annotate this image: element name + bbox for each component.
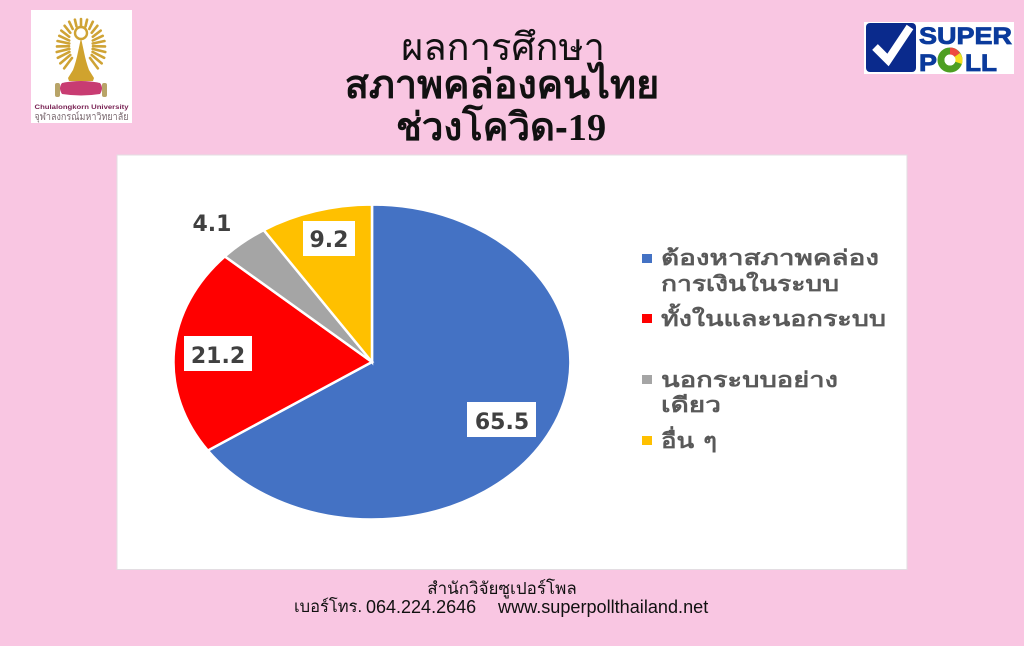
legend: gray: เดียว (661, 393, 721, 417)
legend: blue: การเงินในระบบ (661, 271, 839, 296)
slice: 9.2 yellow (264, 204, 372, 362)
label: 65.5 (467, 402, 536, 437)
legend (642, 246, 886, 453)
icon: pink cushion (60, 81, 102, 96)
footer line 2: www.superpollthailand.net (498, 597, 708, 617)
label: 9.2: 9.2 (310, 228, 348, 253)
slice: 65.5 blue (208, 204, 570, 520)
pie chart (173, 204, 570, 520)
footer line 2 (294, 597, 708, 617)
label: 65.5: 65.5 (475, 410, 529, 435)
logo text: Chulalongkorn University (34, 104, 129, 111)
legend: red (642, 303, 886, 331)
legend: red: ทั้งในและนอกระบบ (661, 303, 886, 331)
label: 9.2 (303, 221, 355, 256)
title line 1: ผลการศึกษา (401, 27, 605, 69)
legend: blue (642, 246, 879, 296)
wordmark: POLL (919, 48, 997, 77)
title line 2: สภาพคล่องคนไทย (345, 63, 659, 107)
footer line 2: 064.224.2646 (366, 597, 476, 617)
data labels (184, 212, 536, 437)
icon: pagoda (68, 38, 94, 81)
wordmark: SUPER: SUPER (919, 23, 1012, 50)
label: 4.1: 4.1 (193, 212, 231, 237)
slice: 4.1 gray (225, 230, 372, 362)
legend: blue: ต้องหาสภาพคล่อง (661, 246, 879, 270)
legend: gray (642, 368, 838, 417)
footer (294, 578, 708, 617)
title line 3: ช่วงโควิด-19 (396, 106, 606, 149)
label: 21.2 (184, 336, 252, 371)
footer line 1: สำนักวิจัยซูเปอร์โพล (427, 579, 577, 598)
logo: Super Poll (864, 22, 1014, 74)
slice: 21.2 red (173, 256, 372, 451)
title (345, 27, 659, 149)
logo: Chulalongkorn University (31, 10, 132, 123)
legend: gray: นอกระบบอย่าง (661, 368, 838, 392)
label: 21.2: 21.2 (191, 344, 245, 369)
panel: chart (116, 154, 908, 570)
legend: yellow (642, 425, 717, 453)
icon: golden rays (57, 19, 105, 68)
legend: yellow: อื่น ๆ (661, 425, 717, 453)
icon: check box (866, 23, 916, 72)
footer line 2: เบอร์โทร. (294, 598, 362, 616)
